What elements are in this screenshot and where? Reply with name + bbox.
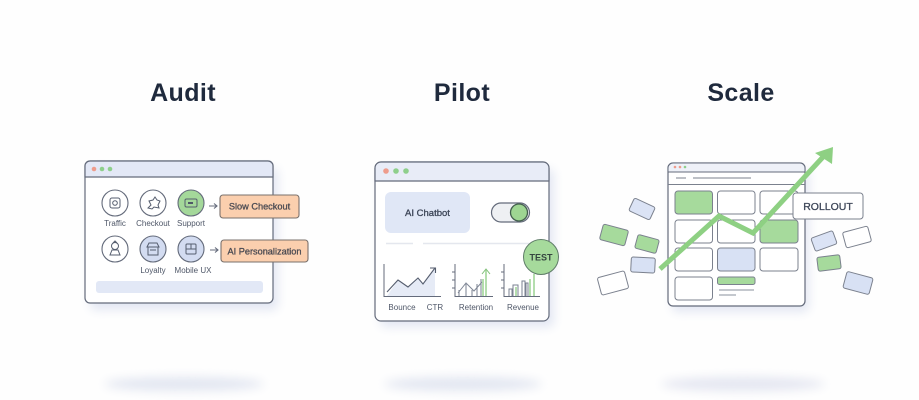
window body (375, 162, 549, 321)
window controls (383, 168, 409, 174)
icon: Loyalty (102, 236, 128, 262)
badge: TEST: TEST (529, 252, 553, 262)
icon: Checkout (140, 190, 166, 216)
label: Revenue: Revenue (507, 303, 540, 312)
chart: Retention (452, 264, 493, 296)
icon: Loyalty store (140, 236, 166, 262)
ground shadow: Pilot (384, 377, 542, 391)
placeholder bar (96, 281, 263, 293)
label: Traffic: Traffic (104, 219, 126, 228)
window controls (674, 166, 686, 168)
panel: Audit browser window (85, 161, 308, 310)
chart: Bounce and CTR (384, 264, 441, 296)
text lines (719, 290, 754, 295)
window body (668, 163, 805, 306)
tag: AI Personalization: AI Personalization (227, 246, 302, 256)
heading: Scale: Scale (707, 79, 775, 107)
label: Bounce: Bounce (388, 303, 416, 312)
card grid (675, 191, 798, 300)
icon: Mobile UX (178, 236, 204, 262)
card: AI Chatbot: AI Chatbot (405, 208, 450, 219)
label: CTR: CTR (427, 303, 443, 312)
label: Support: Support (177, 219, 206, 228)
label: ROLLOUT: ROLLOUT (803, 201, 853, 213)
window controls (92, 167, 112, 171)
ground shadow: Scale (661, 377, 825, 391)
arrow: to AI Personalization (210, 248, 218, 252)
icon: Support (178, 190, 204, 216)
floating cards left (597, 198, 659, 295)
window header (85, 161, 273, 177)
badge: TEST (524, 240, 558, 274)
window body (85, 161, 273, 303)
tag: Slow Checkout (220, 195, 299, 218)
divider lines (386, 242, 530, 244)
label: ROLLOUT (793, 193, 863, 219)
arrow: to Slow Checkout (209, 204, 217, 208)
toggle switch (492, 203, 530, 222)
window header (375, 162, 549, 181)
panel: Scale browser window (668, 163, 809, 312)
tag: Slow Checkout: Slow Checkout (229, 202, 291, 212)
chart: Revenue (501, 264, 540, 296)
heading: Audit: Audit (150, 79, 216, 107)
icon: Traffic (102, 190, 128, 216)
heading: Pilot: Pilot (434, 79, 490, 107)
label: Retention: Retention (459, 303, 493, 312)
card: AI Chatbot (385, 192, 470, 233)
ground shadow: Audit (104, 377, 264, 391)
window header (668, 163, 805, 172)
address bar (668, 178, 805, 184)
panel: Pilot browser window (375, 162, 558, 327)
tag: AI Personalization (221, 240, 308, 262)
arrow: growth trend (660, 147, 833, 269)
label: Loyalty: Loyalty (140, 266, 166, 275)
label: Mobile UX: Mobile UX (175, 266, 212, 275)
floating cards right (811, 226, 873, 295)
label: Checkout: Checkout (136, 219, 171, 228)
